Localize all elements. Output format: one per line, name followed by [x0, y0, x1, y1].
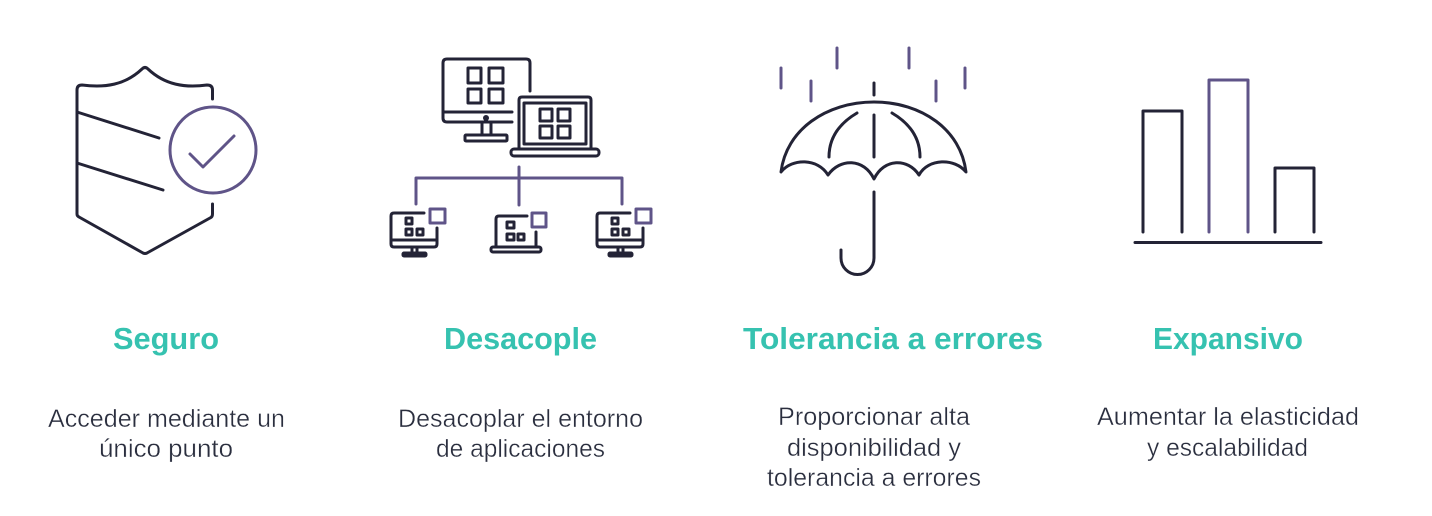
heading: Expansivo: Expansivo	[1153, 321, 1303, 356]
icon: umbrella with rain	[781, 48, 966, 274]
text: Tolerancia description: Proporcionar alta	[778, 403, 970, 431]
text: Expansivo description: y escalabilidad	[1147, 434, 1308, 462]
heading: Desacople: Desacople	[444, 321, 597, 356]
text: Desacople description: de aplicaciones	[436, 435, 605, 463]
connector lines	[416, 167, 622, 205]
text: Seguro description: Acceder mediante un	[48, 405, 285, 433]
text: Expansivo description: Aumentar la elasticidad	[1097, 403, 1359, 431]
text: Seguro description	[48, 405, 285, 463]
text: Tolerancia description: disponibilidad y	[787, 434, 962, 462]
icon: decoupled computers network	[391, 59, 651, 256]
text: Desacople description: Desacoplar el entorno	[398, 405, 643, 433]
text: Seguro description: único punto	[99, 435, 233, 463]
text: Tolerancia description	[767, 403, 981, 492]
text: Tolerancia description: tolerancia a errores	[767, 464, 981, 492]
icon: bar chart	[1135, 80, 1321, 242]
handle	[841, 192, 874, 274]
canopy	[781, 102, 966, 179]
desktop monitor	[443, 59, 530, 141]
rain drops	[781, 48, 965, 101]
right small monitor	[597, 209, 651, 256]
laptop	[511, 97, 599, 156]
text: Expansivo description	[1097, 403, 1359, 462]
icon: shield with check mark	[77, 68, 256, 254]
center small laptop	[491, 213, 546, 252]
heading: Tolerancia a errores: Tolerancia a errores	[743, 321, 1043, 356]
text: Desacople description	[398, 405, 643, 463]
left small monitor	[391, 209, 445, 256]
heading: Seguro: Seguro	[113, 321, 219, 356]
